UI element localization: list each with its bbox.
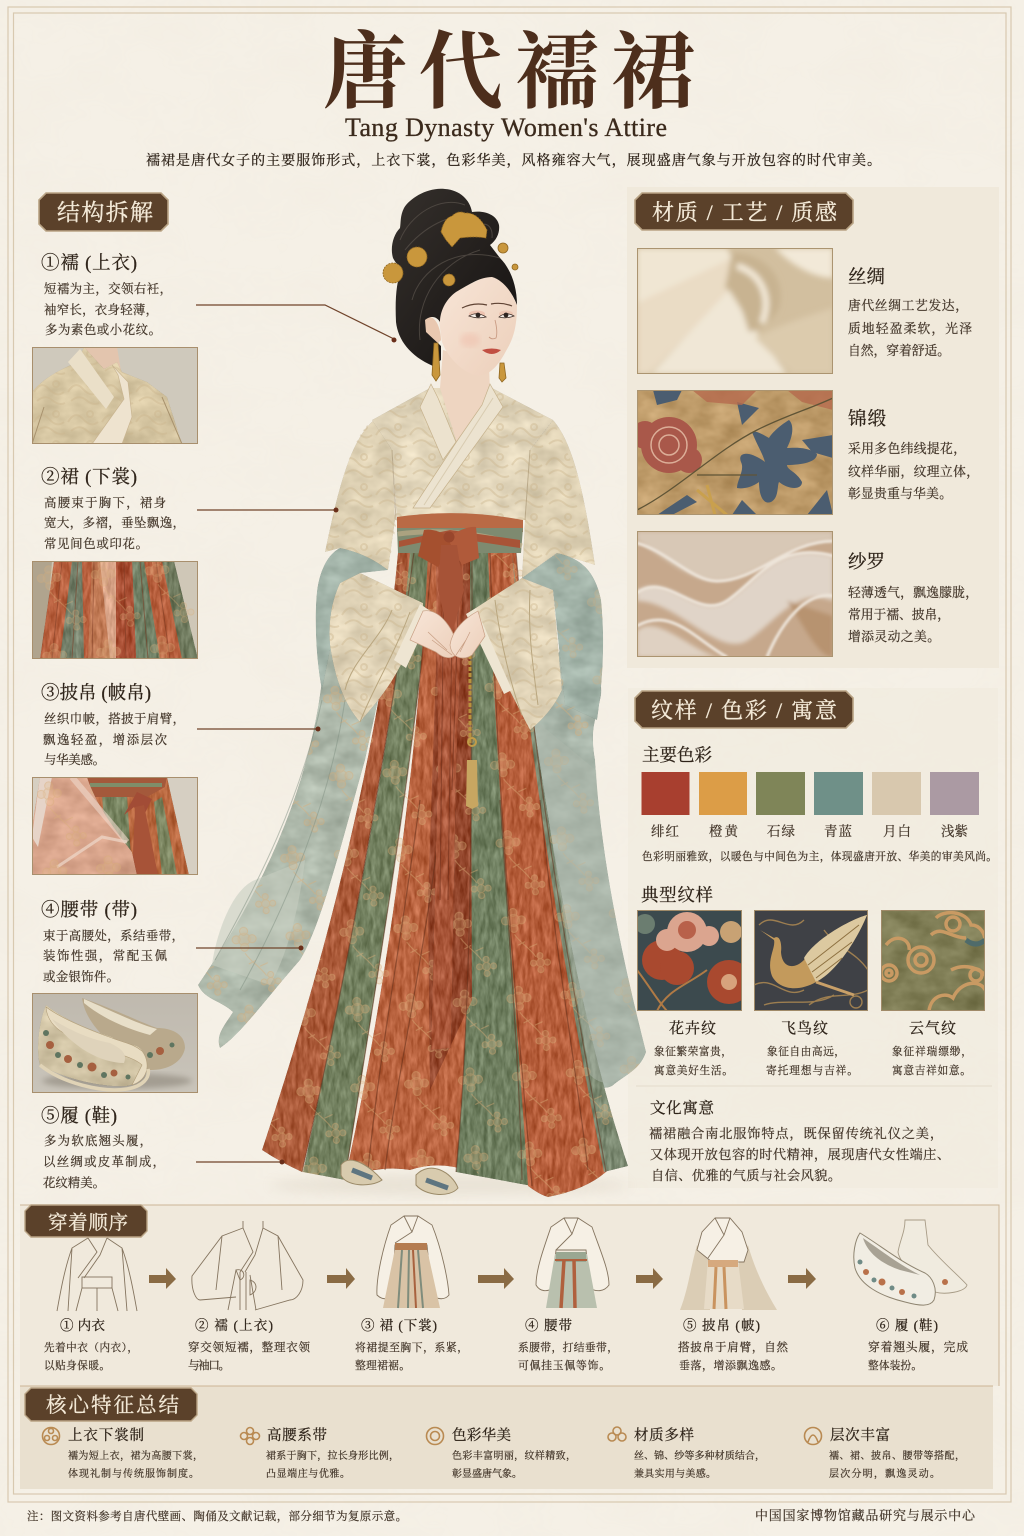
cultural meaning text: 文化寓意 bbox=[650, 1099, 714, 1117]
feature 3: 彰显盛唐气象。 bbox=[452, 1467, 522, 1480]
step captions: ⑤ 披帛 (帔) bbox=[683, 1317, 760, 1333]
text: silk bbox=[848, 267, 972, 359]
back shawl, left side bbox=[198, 600, 378, 1048]
central figure: woman in ruqun bbox=[198, 189, 646, 1197]
colour names bbox=[651, 823, 968, 839]
step captions: 系腰带，打结垂带， bbox=[518, 1340, 618, 1354]
text: gauze bbox=[848, 552, 978, 644]
feature 5 bbox=[804, 1426, 965, 1480]
text: gauze: 常用于襦、披帛， bbox=[848, 607, 950, 623]
text: gauze: 增添灵动之美。 bbox=[848, 629, 940, 644]
feature 1: 体现礼制与传统服饰制度。 bbox=[68, 1467, 199, 1480]
heading badge: structure bbox=[39, 193, 168, 231]
item 1 photo: collar bbox=[32, 347, 198, 444]
leader lines with dots bbox=[196, 305, 396, 1164]
shoes bbox=[341, 1160, 458, 1194]
heading badge: summary: 核心特征总结 bbox=[46, 1394, 179, 1417]
colour names: 绯红 bbox=[651, 823, 680, 839]
gold hair ornaments and earrings bbox=[383, 212, 518, 382]
feature 2 bbox=[240, 1426, 399, 1480]
neck and chest bbox=[440, 350, 490, 443]
step captions: ① 内衣 bbox=[60, 1317, 106, 1333]
heading badge: patterns bbox=[635, 691, 853, 728]
hair bbox=[392, 189, 517, 366]
step 4 sketch: sash bbox=[536, 1218, 609, 1308]
text: brocade: 采用多色纬线提花， bbox=[848, 441, 966, 457]
item 4 photo: shoes bbox=[32, 993, 198, 1093]
subheading: main colours: 主要色彩 bbox=[642, 745, 712, 765]
panel: structure breakdown bbox=[32, 193, 198, 1190]
intro sentence: 襦裙是唐代女子的主要服饰形式，上衣下裳，色彩华美，风格雍容大气，展现盛唐气象与开放包容的时代审美。 bbox=[146, 152, 881, 169]
pattern captions: 象征自由高远， bbox=[767, 1045, 845, 1058]
feature 3: 色彩华美 bbox=[452, 1427, 511, 1444]
feature 2: 裙系于胸下，拉长身形比例， bbox=[266, 1449, 399, 1462]
jade tassel pendant bbox=[466, 655, 478, 809]
English subtitle: Tang Dynasty Women's Attire bbox=[345, 113, 667, 142]
item 1 text bbox=[41, 253, 172, 337]
cultural meaning text bbox=[649, 1099, 950, 1183]
pattern captions: 飞鸟纹 bbox=[781, 1020, 828, 1037]
item 1 text: 多为素色或小花纹。 bbox=[45, 322, 161, 337]
step captions: 整体装扮。 bbox=[868, 1359, 922, 1372]
feature 4: 材质多样 bbox=[634, 1427, 694, 1444]
feature 2: 高腰系带 bbox=[267, 1426, 328, 1444]
item 2 text: 宽大，多褶，垂坠飘逸， bbox=[44, 515, 185, 530]
text: brocade bbox=[848, 409, 979, 501]
text: brocade: 彰显贵重与华美。 bbox=[848, 486, 952, 501]
heading badge: wearing order: 穿着顺序 bbox=[48, 1212, 128, 1234]
panel: materials bbox=[631, 193, 979, 657]
step captions: 整理裙裾。 bbox=[355, 1358, 410, 1372]
item 4 text: ④腰带 (带) bbox=[41, 900, 137, 921]
heading badge: materials: 材质 / 工艺 / 质感 bbox=[652, 200, 837, 225]
pattern captions: 寄托理想与吉祥。 bbox=[766, 1064, 858, 1077]
item 2 text: 高腰束于胸下，裙身 bbox=[44, 495, 166, 510]
colour names: 浅紫 bbox=[941, 823, 968, 839]
colour names: 橙黄 bbox=[709, 823, 738, 839]
step captions: 与袖口。 bbox=[188, 1358, 230, 1372]
panel: core features summary bbox=[20, 1386, 993, 1489]
pattern captions: 象征祥瑞缥缈， bbox=[892, 1045, 972, 1058]
hanging sash ribbons bbox=[431, 552, 464, 1050]
arrow bbox=[636, 1268, 663, 1289]
item 2 text: 常见间色或印花。 bbox=[44, 536, 148, 551]
step captions: 可佩挂玉佩等饰。 bbox=[518, 1358, 610, 1372]
pattern image: bird bbox=[754, 910, 868, 1011]
panel: patterns backdrop bbox=[628, 688, 998, 1188]
left forearm sleeve bbox=[329, 573, 432, 722]
feature 4: 兼具实用与美感。 bbox=[634, 1467, 716, 1480]
clasped hands bbox=[410, 611, 485, 658]
step 6 picture: shoes bbox=[854, 1220, 967, 1305]
pattern image: clouds bbox=[881, 910, 985, 1011]
item 4 text bbox=[41, 900, 184, 984]
feature 1: 上衣下裳制 bbox=[68, 1426, 144, 1444]
step captions: 搭披帛于肩臂，自然 bbox=[678, 1340, 788, 1354]
skirt waistband with bow bbox=[397, 513, 523, 640]
text: silk: 自然，穿着舒适。 bbox=[848, 343, 950, 359]
item 4 text: 束于高腰处，系结垂带， bbox=[43, 928, 184, 943]
item 3 text: 与华美感。 bbox=[44, 752, 105, 767]
pattern captions bbox=[654, 1019, 972, 1077]
step captions: ④ 腰带 bbox=[525, 1317, 572, 1333]
item 4 text: 装饰性强，常配玉佩 bbox=[43, 948, 167, 963]
pattern captions: 象征繁荣富贵， bbox=[654, 1045, 732, 1058]
colour swatches bbox=[642, 772, 979, 815]
step captions: 以贴身保暖。 bbox=[44, 1359, 110, 1372]
step captions: 垂落，增添飘逸感。 bbox=[679, 1358, 782, 1372]
item 3 photo: sheer shawl and sash bbox=[32, 777, 198, 875]
text: brocade: 纹样华丽，纹理立体， bbox=[848, 464, 979, 480]
cultural meaning text: 又体现开放包容的时代精神，展现唐代女性端庄、 bbox=[650, 1146, 950, 1163]
pattern captions: 寓意吉祥如意。 bbox=[892, 1064, 971, 1077]
footer note: 注：图文资料参考自唐代壁画、陶俑及文献记载，部分细节为复原示意。 bbox=[27, 1509, 407, 1523]
skirt: pleated panels bbox=[262, 552, 628, 1197]
heading badge: summary bbox=[25, 1388, 197, 1421]
cultural meaning text: 襦裙融合南北服饰特点，既保留传统礼仪之美， bbox=[649, 1125, 943, 1142]
item 1 text: ①襦 (上衣) bbox=[41, 253, 137, 274]
text: gauze: 轻薄透气，飘逸朦胧， bbox=[848, 585, 978, 601]
panel: materials backdrop bbox=[627, 187, 999, 668]
right forearm sleeve bbox=[466, 578, 562, 730]
shawl draped over upper arm, right bbox=[522, 553, 603, 720]
text: silk: 丝绸 bbox=[848, 267, 885, 288]
heading badge: structure: 结构拆解 bbox=[57, 200, 153, 225]
item 2 photo: skirt stripes bbox=[32, 561, 198, 659]
subheading: typical patterns: 典型纹样 bbox=[641, 885, 713, 905]
shawl draped over upper arm, left bbox=[316, 548, 388, 690]
item 3 text: ③披帛 (帔帛) bbox=[41, 683, 151, 704]
pattern captions: 花卉纹 bbox=[669, 1019, 716, 1037]
swatch: brocade bbox=[637, 390, 833, 515]
colour names: 石绿 bbox=[767, 824, 796, 839]
item 5 text: 花纹精美。 bbox=[43, 1175, 105, 1190]
pattern captions: 云气纹 bbox=[909, 1020, 956, 1037]
footer credit: 中国国家博物馆藏品研究与展示中心 bbox=[755, 1508, 976, 1523]
item 3 text: 丝织巾帔，搭披于肩臂， bbox=[44, 711, 185, 726]
colour description: 色彩明丽雅致，以暖色与中间色为主，体现盛唐开放、华美的审美风尚。 bbox=[642, 850, 997, 863]
text: silk: 唐代丝绸工艺发达， bbox=[848, 298, 968, 314]
swatch: gauze bbox=[637, 531, 833, 657]
step captions: 将裙提至胸下，系紧， bbox=[355, 1340, 468, 1354]
arrow bbox=[149, 1268, 176, 1289]
panel: wearing order bbox=[20, 1205, 999, 1386]
arrow bbox=[788, 1268, 816, 1289]
heading badge: patterns: 纹样 / 色彩 / 寓意 bbox=[651, 698, 837, 723]
step captions: 穿着翘头履，完成 bbox=[868, 1340, 968, 1354]
arrow bbox=[327, 1268, 355, 1289]
item 2 text bbox=[41, 467, 185, 551]
item 3 text: 飘逸轻盈，增添层次 bbox=[43, 732, 168, 747]
ground shadow bbox=[270, 1175, 630, 1195]
feature 5: 襦、裙、披帛、腰带等搭配， bbox=[829, 1449, 965, 1462]
feature 4 bbox=[608, 1427, 765, 1480]
step captions: ② 襦 (上衣) bbox=[195, 1318, 273, 1333]
cultural meaning text: 自信、优雅的气质与社会风貌。 bbox=[651, 1167, 841, 1183]
step captions bbox=[44, 1317, 968, 1372]
translucent shawl over right skirt edge bbox=[535, 720, 646, 1083]
pattern image: floral bbox=[637, 910, 742, 1011]
feature 5: 层次分明，飘逸灵动。 bbox=[829, 1467, 940, 1480]
item 2 text: ②裙 (下裳) bbox=[41, 467, 137, 488]
feature 3 bbox=[426, 1427, 576, 1480]
item 5 text: ⑤履 (鞋) bbox=[41, 1106, 117, 1127]
feature 3: 色彩丰富明丽，纹样精致， bbox=[452, 1449, 576, 1462]
item 3 text bbox=[41, 683, 185, 767]
step 1 sketch: inner garment bbox=[57, 1238, 137, 1311]
text: brocade: 锦缎 bbox=[848, 409, 886, 430]
upper robe torso bbox=[325, 388, 595, 578]
back shawl, right side bbox=[525, 600, 646, 1088]
heading badge: materials bbox=[635, 193, 853, 230]
text: gauze: 纱罗 bbox=[848, 552, 885, 573]
feature 4: 丝、锦、纱等多种材质结合， bbox=[634, 1449, 765, 1462]
colour names: 青蓝 bbox=[824, 823, 852, 839]
step 3 sketch: skirt bbox=[377, 1216, 449, 1308]
step captions: 穿交领短襦，整理衣领 bbox=[188, 1340, 310, 1354]
heading badge: wearing order bbox=[25, 1205, 147, 1237]
title: 唐代襦裙 bbox=[323, 27, 695, 120]
upper arms of robe bbox=[325, 420, 595, 578]
item 5 text: 多为软底翘头履， bbox=[44, 1133, 152, 1148]
feature 1 bbox=[42, 1426, 203, 1480]
step captions: ⑥ 履 (鞋) bbox=[876, 1317, 938, 1333]
crossed collar bbox=[413, 384, 503, 508]
face bbox=[424, 270, 517, 376]
feature 2: 凸显端庄与优雅。 bbox=[266, 1467, 350, 1480]
item 5 text bbox=[41, 1106, 165, 1190]
feature 5: 层次丰富 bbox=[830, 1426, 890, 1444]
colour names: 月白 bbox=[883, 824, 911, 839]
arrow bbox=[478, 1268, 514, 1289]
item 5 text: 以丝绸或皮革制成， bbox=[43, 1154, 165, 1169]
item 1 text: 短襦为主，交领右衽， bbox=[44, 281, 172, 296]
feature 1: 襦为短上衣，裙为高腰下裳， bbox=[68, 1449, 203, 1462]
step captions: 先着中衣（内衣）， bbox=[44, 1341, 138, 1354]
step 2 sketch: upper garment bbox=[192, 1221, 303, 1310]
step captions: ③ 裙 (下裳) bbox=[361, 1317, 437, 1333]
swatch: silk bbox=[637, 248, 833, 374]
text: silk: 质地轻盈柔软，光泽 bbox=[848, 321, 972, 337]
panel: patterns, colours and meaning bbox=[635, 691, 997, 1183]
item 4 text: 或金银饰件。 bbox=[43, 969, 119, 984]
item 1 text: 袖窄长，衣身轻薄， bbox=[44, 302, 158, 317]
pattern captions: 寓意美好生活。 bbox=[654, 1064, 733, 1077]
step 5 sketch: shawl bbox=[680, 1218, 777, 1310]
